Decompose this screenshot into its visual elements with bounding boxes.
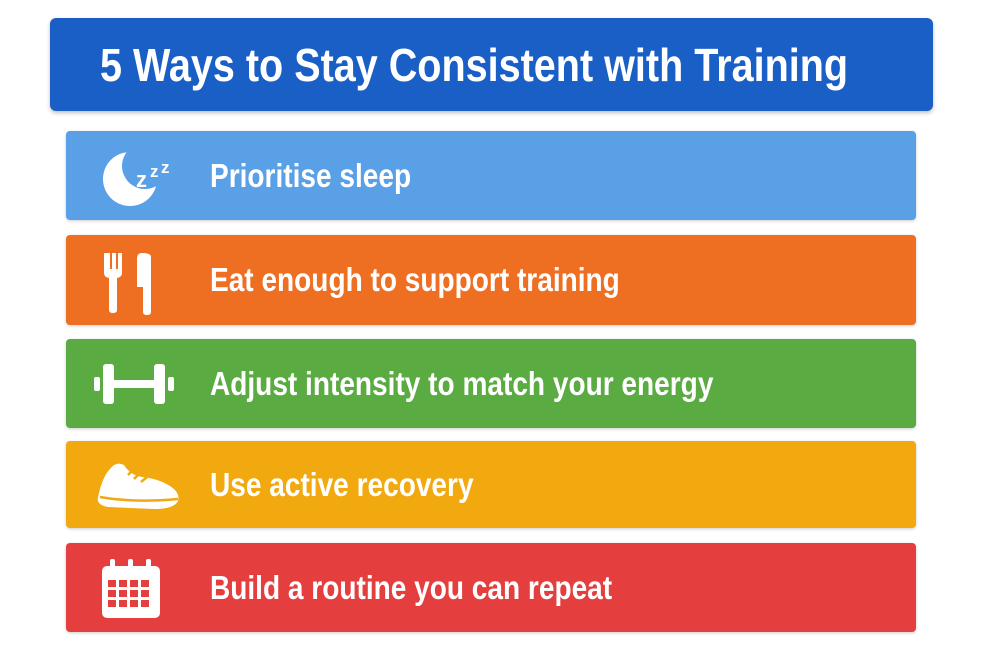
icon: calendar	[102, 559, 160, 618]
text: Eat enough to support training	[210, 261, 620, 298]
icon: fork and knife	[104, 253, 151, 315]
row: eat	[66, 235, 916, 325]
text: Build a routine you can repeat	[210, 568, 612, 606]
icon: moon	[103, 152, 170, 206]
icon: shoe	[98, 464, 178, 509]
text: Prioritise sleep	[210, 156, 411, 194]
row: routine	[66, 543, 916, 632]
text: Adjust intensity to match your energy	[210, 364, 713, 402]
row: sleep	[66, 131, 916, 220]
icon: moon: z	[136, 166, 147, 192]
text: Use active recovery	[210, 466, 474, 502]
icon: dumbbell	[94, 364, 174, 404]
icon: moon: z	[161, 158, 170, 176]
icon: moon: z	[150, 162, 158, 180]
title: 5 Ways to Stay Consistent with Training	[100, 39, 848, 91]
title	[50, 18, 933, 111]
row: recovery	[66, 441, 916, 528]
row: intensity	[66, 339, 916, 428]
